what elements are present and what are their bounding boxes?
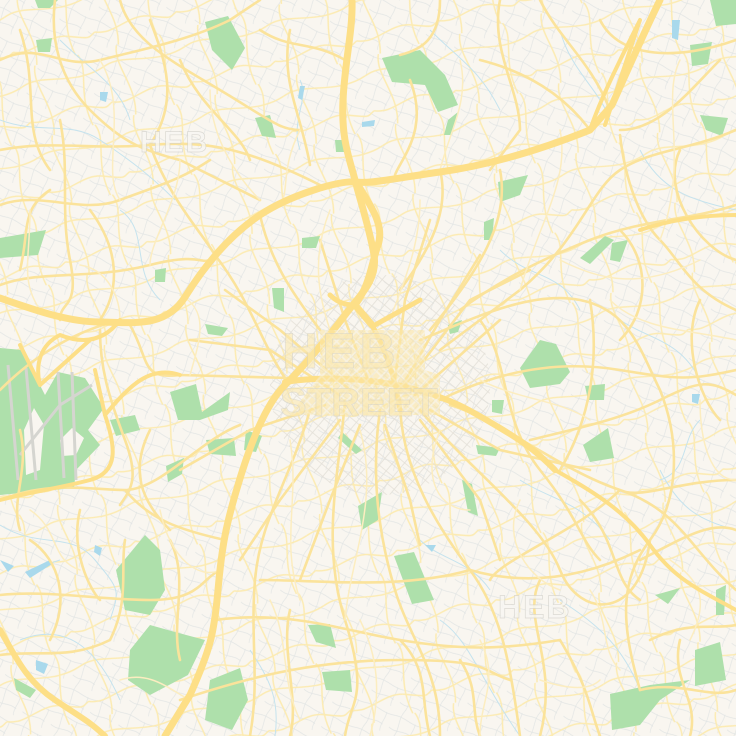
downtown halftone block — [290, 330, 440, 415]
watermark: bottom right: HEB — [498, 589, 572, 625]
watermark: centre top: HEB — [282, 323, 400, 379]
highway: southeast arterial — [555, 470, 736, 610]
highway: eastern boulevard — [590, 20, 736, 230]
highway: downtown connector — [330, 295, 420, 410]
watermark: top left: HEB — [140, 126, 209, 159]
highway: northeast to west interstate — [0, 0, 660, 323]
highway: inner city loop — [285, 379, 555, 470]
watermark: centre bottom: STREET — [280, 381, 438, 425]
airport open ground — [24, 408, 84, 475]
highway: southwest spur — [0, 630, 105, 736]
highway: central connector — [355, 185, 380, 325]
highway: north-south interstate — [165, 0, 375, 736]
highway: airport roads — [0, 370, 180, 500]
highway: western spur — [20, 320, 120, 385]
airport runways — [8, 365, 92, 480]
downtown street grid — [270, 275, 490, 495]
